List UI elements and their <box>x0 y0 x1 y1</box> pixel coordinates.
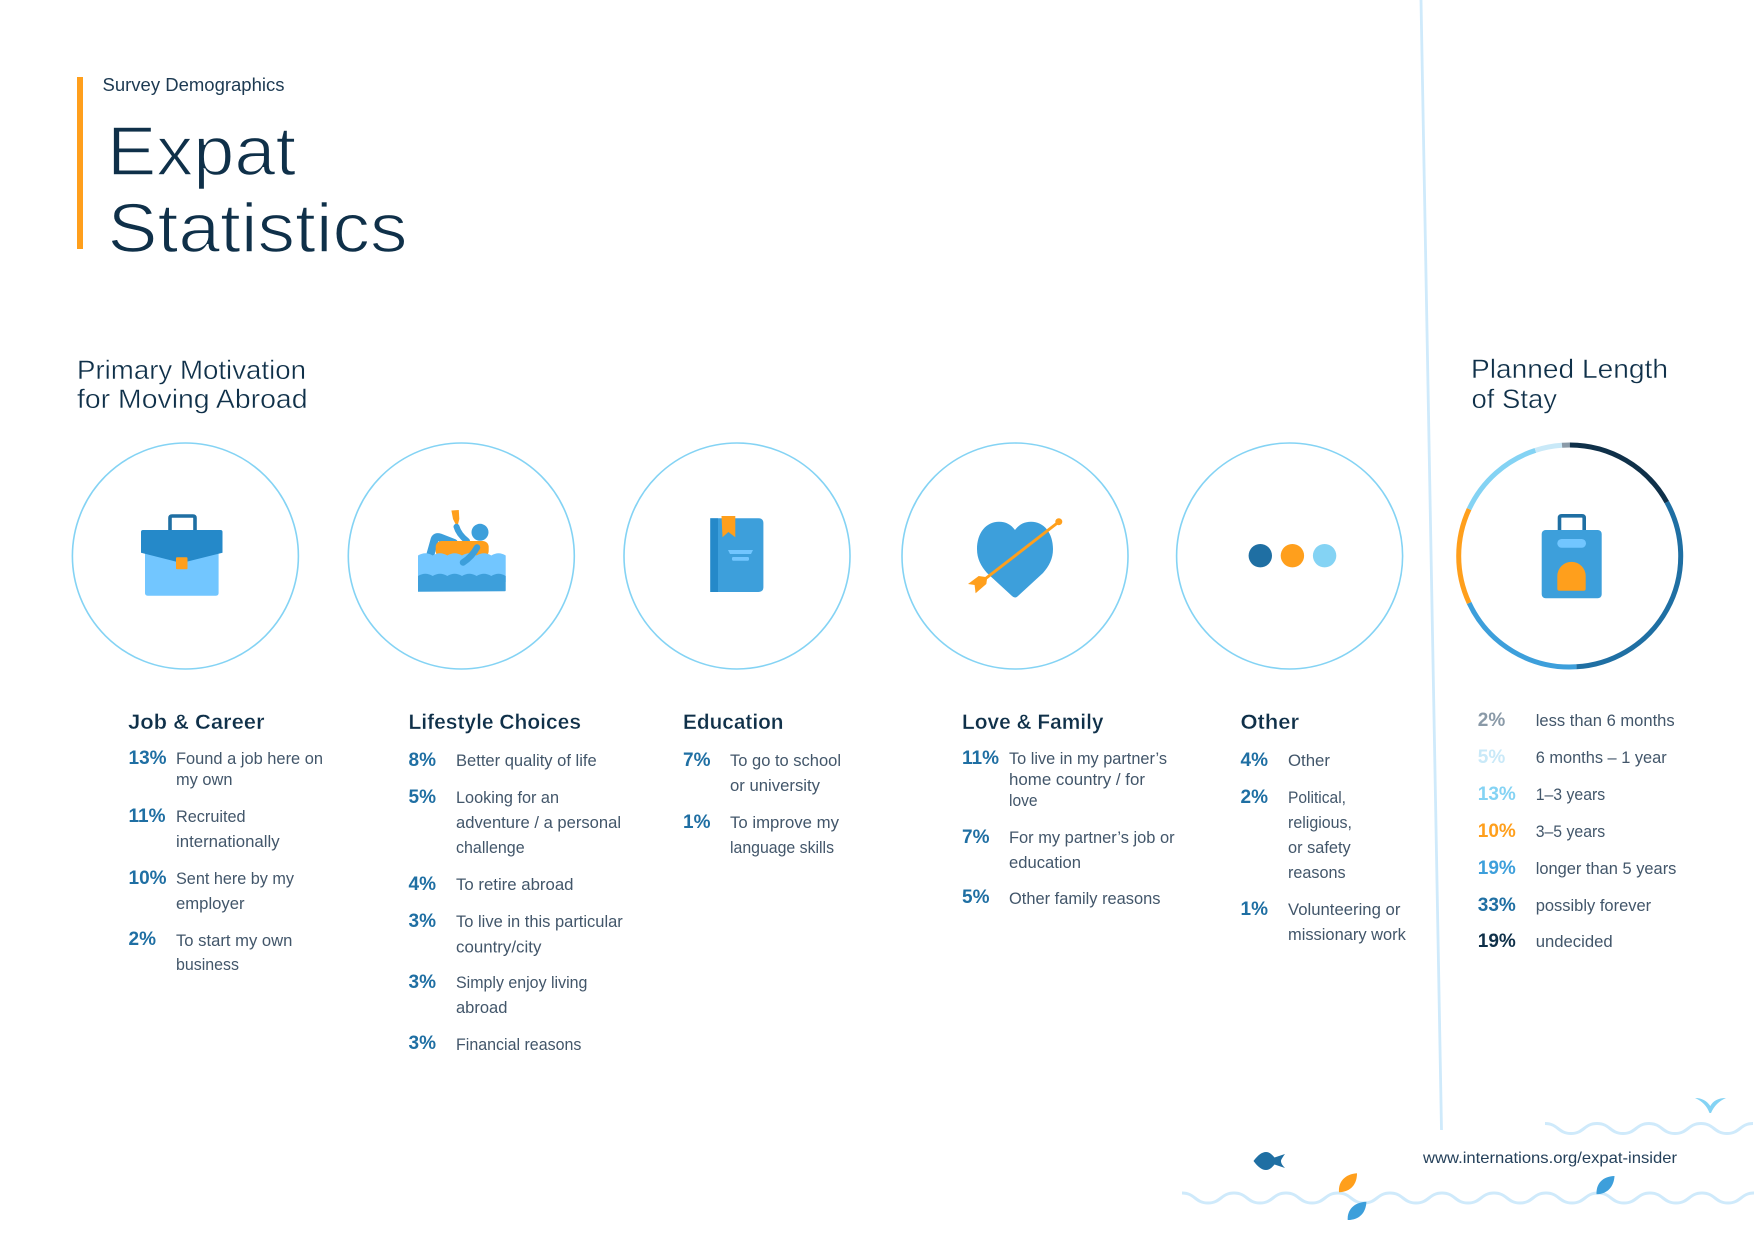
heading: planned length of stay: of Stay <box>1472 384 1558 414</box>
text block: length of stay legend: 10% <box>1478 821 1516 842</box>
text block: job and career: Job & Career <box>128 711 264 734</box>
text block: education: To go to school <box>730 751 841 770</box>
text block: lifestyle choices: 3% <box>408 1033 436 1054</box>
text block: love and family: 11% <box>962 748 999 769</box>
icon: blue leaf left <box>1348 1202 1366 1220</box>
text block: other: 1% <box>1240 899 1268 920</box>
heading: primary motivation: for Moving Abroad <box>77 384 308 414</box>
title block: Statistics <box>108 189 408 267</box>
text block: lifestyle choices: abroad <box>456 998 507 1017</box>
text block: length of stay legend: 3–5 years <box>1536 822 1605 841</box>
text block: length of stay legend: longer than 5 years <box>1536 859 1676 878</box>
text block: job and career: my own <box>176 770 232 789</box>
text block: love and family: To live in my partner’s <box>1009 749 1167 768</box>
heading: planned length of stay <box>1471 354 1668 414</box>
text block: love and family <box>962 711 1175 908</box>
text block: lifestyle choices: Looking for an <box>456 788 559 807</box>
text block: job and career: Recruited <box>176 807 246 826</box>
icon: fish <box>1254 1152 1285 1170</box>
text block: length of stay legend: 19% <box>1478 858 1516 879</box>
panel: love and family circle <box>902 443 1128 669</box>
text block: love and family: 7% <box>962 827 990 848</box>
text block: length of stay legend: 6 months – 1 year <box>1536 748 1667 767</box>
icon: heart with arrow <box>968 518 1062 598</box>
text block: love and family: 5% <box>962 887 990 908</box>
text block: lifestyle choices: 3% <box>408 911 436 932</box>
footer url: www.internations.org/expat-insider <box>1422 1150 1678 1167</box>
text block: lifestyle choices: To retire abroad <box>456 875 574 894</box>
heading: planned length of stay: Planned Length <box>1471 354 1668 384</box>
text block: other: Other <box>1288 751 1330 770</box>
icon: orange leaf <box>1339 1173 1357 1192</box>
icon: book <box>710 516 763 592</box>
text block: job and career <box>128 711 323 974</box>
donut chart: planned length of stay <box>1459 445 1681 667</box>
text block: other: religious, <box>1288 813 1352 832</box>
panel: lifestyle choices circle <box>348 443 574 669</box>
text block: job and career: Found a job here on <box>176 749 323 768</box>
text block: other: 4% <box>1240 750 1268 771</box>
text block: lifestyle choices: 8% <box>408 750 436 771</box>
text block: love and family: Other family reasons <box>1009 889 1160 908</box>
heading: primary motivation: Primary Motivation <box>77 355 306 385</box>
text block: other: 2% <box>1240 787 1268 808</box>
text block: education <box>683 711 841 857</box>
text block: love and family: education <box>1009 853 1081 872</box>
text block: job and career: internationally <box>176 832 280 851</box>
text block: length of stay legend: 33% <box>1478 895 1516 916</box>
title block: Expat <box>107 112 296 190</box>
text block: other: or safety <box>1288 838 1351 857</box>
panel: education circle <box>624 443 850 669</box>
icon: swimmer in tube <box>418 510 506 592</box>
text block: lifestyle choices: challenge <box>456 838 525 857</box>
text block: job and career: 13% <box>128 748 167 769</box>
panel: job and career circle <box>72 443 298 669</box>
text block: love and family: home country / for <box>1009 770 1145 789</box>
text block: lifestyle choices: 5% <box>408 787 436 808</box>
icon: three dots <box>1249 544 1336 567</box>
text block: length of stay legend <box>1478 710 1676 952</box>
text block: length of stay legend: less than 6 months <box>1536 711 1675 730</box>
text block: love and family: For my partner’s job or <box>1009 828 1175 847</box>
text block: education: language skills <box>730 838 834 857</box>
icon: blue leaf right <box>1596 1176 1614 1194</box>
heading: primary motivation <box>77 355 308 414</box>
text block: lifestyle choices: 4% <box>408 874 436 895</box>
text block: other: Political, <box>1288 788 1346 807</box>
text block: length of stay legend: 19% <box>1478 931 1516 952</box>
icon: suitcase <box>1542 516 1602 598</box>
text block: other: Other <box>1240 711 1299 734</box>
text block: lifestyle choices: adventure / a personal <box>456 813 621 832</box>
text block: love and family: love <box>1009 791 1038 810</box>
text block: education: 7% <box>683 750 711 771</box>
text block: job and career: 11% <box>128 806 166 827</box>
title block <box>77 75 408 267</box>
text block: education: Education <box>683 711 784 734</box>
text block: job and career: employer <box>176 894 245 913</box>
text block: education: To improve my <box>730 813 839 832</box>
text block: lifestyle choices <box>408 711 623 1054</box>
text block: length of stay legend: 1–3 years <box>1536 785 1605 804</box>
text block: length of stay legend: possibly forever <box>1536 896 1652 915</box>
text block: education: 1% <box>683 812 711 833</box>
icon: briefcase <box>141 516 222 596</box>
text block: job and career: 2% <box>128 929 156 950</box>
text block: job and career: 10% <box>128 868 167 889</box>
panel: other circle <box>1177 443 1403 669</box>
text block: length of stay legend: 2% <box>1478 710 1505 731</box>
icon: bird <box>1695 1098 1726 1113</box>
text block: lifestyle choices: 3% <box>408 972 436 993</box>
text block: lifestyle choices: country/city <box>456 938 542 956</box>
text block: education: or university <box>730 776 820 795</box>
text block: lifestyle choices: Financial reasons <box>456 1035 581 1054</box>
text block: length of stay legend: undecided <box>1536 932 1613 951</box>
text block: job and career: To start my own <box>176 931 292 950</box>
text block: lifestyle choices: Lifestyle Choices <box>408 711 581 734</box>
text block: other: Volunteering or <box>1288 900 1401 919</box>
text block: other <box>1240 711 1406 944</box>
text block: lifestyle choices: Better quality of life <box>456 751 597 770</box>
title block: Survey Demographics <box>102 75 284 95</box>
text block: lifestyle choices: To live in this particular <box>456 912 623 931</box>
text block: job and career: Sent here by my <box>176 869 294 888</box>
text block: love and family: Love & Family <box>962 711 1104 734</box>
text block: length of stay legend: 5% <box>1478 747 1505 768</box>
text block: other: missionary work <box>1288 925 1406 944</box>
text block: job and career: business <box>176 955 239 974</box>
text block: other: reasons <box>1288 863 1346 882</box>
text block: length of stay legend: 13% <box>1478 784 1516 805</box>
text block: lifestyle choices: Simply enjoy living <box>456 973 587 992</box>
